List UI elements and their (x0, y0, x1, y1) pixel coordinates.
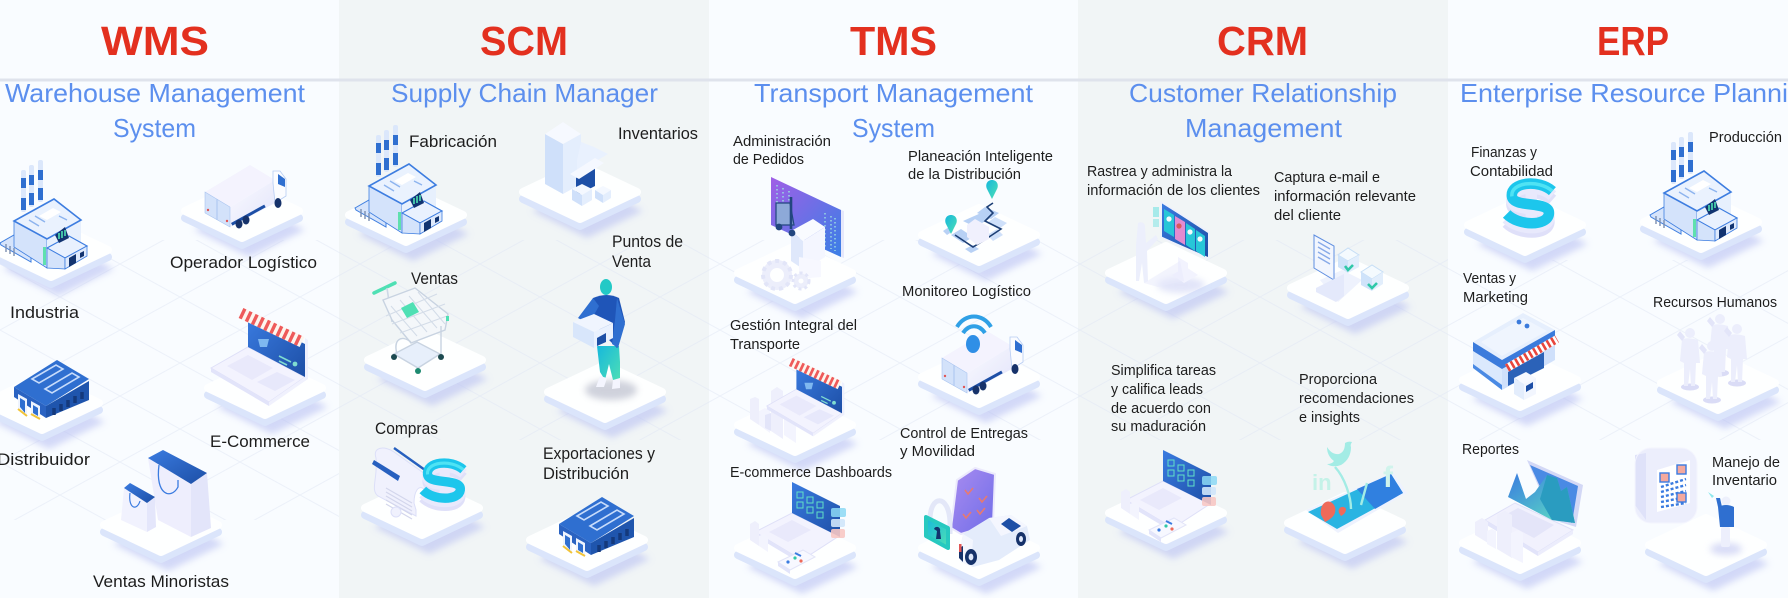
label: Puntos de Venta: Venta (612, 252, 651, 271)
label: Rastrea y administra la información de los clientes (1087, 163, 1260, 199)
icon: warehouse (0, 360, 105, 449)
label: Exportaciones y Distribución: Exportaciones y (543, 444, 655, 463)
label: Captura e-mail e información relevante del cliente: del cliente (1274, 207, 1341, 224)
subtitle: Warehouse Management System (5, 78, 306, 143)
label: Gestión Integral del Transporte: Transporte (730, 336, 800, 353)
icon: factory (349, 125, 469, 261)
label: Control de Entregas y Movilidad: Control de Entregas (900, 425, 1028, 442)
label: Finanzas y Contabilidad: Contabilidad (1470, 163, 1553, 180)
label: Gestión Integral del Transporte (730, 317, 857, 353)
icon: dashboard laptop (738, 482, 858, 594)
label: Simplifica tareas y califica leads de acuerdo con su maduración: Simplifica tareas (1111, 362, 1216, 379)
label: Finanzas y Contabilidad (1470, 144, 1553, 180)
label: Ventas: Ventas (411, 269, 458, 288)
label: Industria: Industria (10, 303, 80, 322)
label: Administración de Pedidos (733, 133, 831, 168)
label: Simplifica tareas y califica leads de acuerdo con su maduración: su maduración (1111, 418, 1206, 435)
subtitle: Transport Management System (754, 78, 1034, 143)
icon: wifi signal (957, 316, 991, 353)
icon: person carrying box (548, 279, 668, 438)
icon: dashboard laptop (1109, 450, 1229, 559)
heading: WMS: WMS (101, 18, 209, 64)
subtitle: Warehouse Management System: Warehouse Management (5, 78, 306, 108)
icon: dollar sign (1468, 184, 1588, 271)
label: Reportes: Reportes (1462, 441, 1519, 458)
icon: shopping bags (104, 450, 224, 571)
panel: SCM (339, 0, 709, 598)
label: Puntos de Venta: Puntos de (612, 232, 683, 251)
label: Proporciona recomendaciones e insights: e insights (1299, 409, 1360, 426)
icon: e-commerce laptop (208, 313, 328, 434)
subtitle: Supply Chain Manager: Supply Chain Manager (391, 78, 658, 108)
label: Planeación Inteligente de la Distribución: Planeación Inteligente (908, 148, 1053, 165)
label: Manejo de Inventario: Inventario (1712, 472, 1777, 489)
label: Exportaciones y Distribución (543, 444, 655, 483)
label: Manejo de Inventario (1712, 454, 1780, 489)
heading: ERP: ERP (1597, 18, 1669, 64)
label: E-commerce Dashboards: E-commerce Dashboards (730, 464, 892, 481)
label: Finanzas y Contabilidad: Finanzas y (1471, 144, 1537, 161)
label: Gestión Integral del Transporte: Gestión Integral del (730, 317, 857, 334)
subtitle: Customer Relationship Management (1129, 78, 1397, 143)
label: E-Commerce: E-Commerce (210, 432, 310, 451)
label: Puntos de Venta (612, 232, 683, 271)
label: Control de Entregas y Movilidad (900, 425, 1028, 460)
label: Rastrea y administra la información de los clientes: Rastrea y administra la (1087, 163, 1233, 180)
label: Ventas y Marketing: Ventas y (1463, 270, 1516, 287)
subtitle: Transport Management System: Transport Management (754, 78, 1034, 108)
icon: factory (0, 160, 114, 296)
heading: CRM: CRM (1217, 18, 1308, 64)
label: Monitoreo Logístico: Monitoreo Logístico (902, 283, 1031, 300)
icon: laptop with store awning (738, 362, 858, 471)
icon: laptop with chart (1463, 460, 1583, 589)
label: Operador Logístico: Operador Logístico (170, 253, 317, 272)
label: Control de Entregas y Movilidad: y Movilidad (900, 443, 975, 460)
label: Administración de Pedidos: de Pedidos (733, 151, 804, 168)
label: Planeación Inteligente de la Distribución: de la Distribución (908, 166, 1021, 183)
label: Compras: Compras (375, 419, 438, 438)
label: Administración de Pedidos: Administración (733, 133, 831, 150)
heading: TMS: TMS (850, 18, 937, 64)
icon: connected truck (922, 316, 1042, 423)
subtitle: Warehouse Management System: System (113, 113, 196, 143)
panel: TMS (709, 0, 1078, 598)
icon: lock, phone and van (922, 468, 1042, 594)
label: Producción: Producción (1709, 129, 1782, 146)
label: Proporciona recomendaciones e insights: recomendaciones (1299, 390, 1414, 407)
label: Inventarios: Inventarios (618, 124, 698, 143)
label: Ventas Minoristas: Ventas Minoristas (93, 572, 229, 591)
label: Simplifica tareas y califica leads de acuerdo con su maduración: y califica leads (1111, 381, 1203, 398)
icon: warehouse (530, 497, 650, 586)
icon: group of people (1661, 314, 1781, 429)
label: Captura e-mail e información relevante del cliente: información relevante (1274, 188, 1416, 205)
icon: shopping cart (368, 283, 488, 406)
label: Ventas y Marketing (1463, 270, 1528, 306)
panel: WMS (0, 0, 339, 598)
subtitle: Customer Relationship Management: Customer Relationship (1129, 78, 1397, 108)
label: Simplifica tareas y califica leads de acuerdo con su maduración (1111, 362, 1216, 435)
icon: phone with social media (1288, 442, 1408, 569)
icon: route planning (922, 180, 1042, 281)
panel: CRM (1078, 0, 1448, 598)
icon: receipt and dollar (365, 448, 485, 554)
icon: inventory boxes (523, 122, 643, 238)
icon: email and data cubes (1291, 235, 1411, 334)
label: Exportaciones y Distribución: Distribución (543, 464, 629, 483)
panel: ERP (1448, 0, 1788, 598)
icon: factory (1644, 132, 1764, 268)
subtitle: Customer Relationship Management: Management (1185, 113, 1343, 143)
heading: SCM: SCM (480, 18, 568, 64)
icon: person at monitor (1109, 202, 1229, 319)
label: Captura e-mail e información relevante del cliente (1274, 169, 1416, 224)
icon: QR code and person (1635, 448, 1769, 591)
label: Proporciona recomendaciones e insights: Proporciona (1299, 371, 1378, 388)
label: Rastrea y administra la información de los clientes: información de los clientes (1087, 182, 1260, 199)
label: Ventas y Marketing: Marketing (1463, 289, 1528, 306)
label: Planeación Inteligente de la Distribución (908, 148, 1053, 183)
icon: order management screen (738, 177, 858, 319)
label: Recursos Humanos: Recursos Humanos (1653, 294, 1777, 311)
label: Manejo de Inventario: Manejo de (1712, 454, 1780, 471)
icon: store (1463, 313, 1583, 426)
label: Proporciona recomendaciones e insights (1299, 371, 1414, 426)
label: Fabricación: Fabricación (409, 132, 497, 151)
icon: truck (185, 165, 305, 257)
subtitle: Transport Management System: System (852, 113, 935, 143)
label: Captura e-mail e información relevante del cliente: Captura e-mail e (1274, 169, 1380, 186)
label: Simplifica tareas y califica leads de acuerdo con su maduración: de acuerdo con (1111, 400, 1211, 417)
